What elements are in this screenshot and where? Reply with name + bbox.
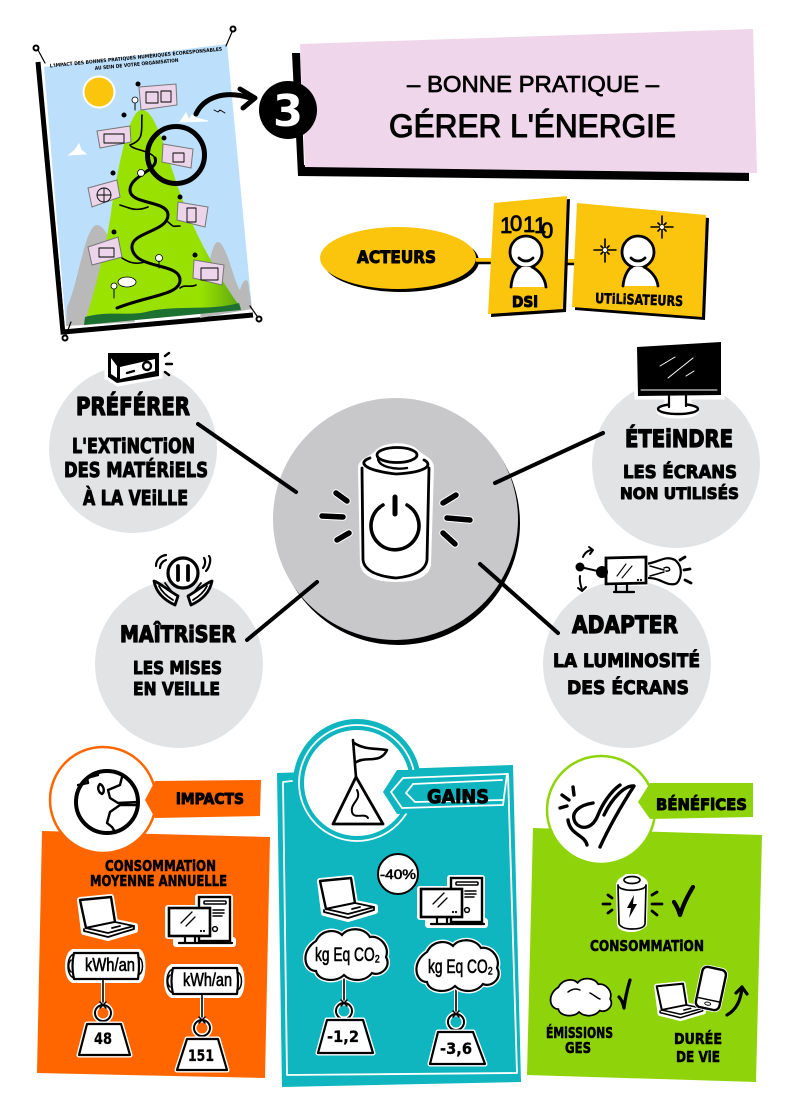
poster road xyxy=(117,158,180,308)
label: durée de vie: DURÉE xyxy=(674,1029,722,1048)
poster thumbnail: AU SEIN DE VOTRE ORGANISATION xyxy=(95,58,179,72)
arrow to step badge xyxy=(196,89,255,114)
icon: battery with lightning xyxy=(603,875,662,931)
poster clouds xyxy=(69,113,208,155)
poster frame xyxy=(38,62,253,332)
side circle: éteindre xyxy=(592,340,760,548)
label: émissions GES: GES xyxy=(565,1039,591,1057)
panel: bénéfices xyxy=(527,756,762,1082)
central circle xyxy=(273,398,520,645)
bénéfices heading: BÉNÉFiCES xyxy=(656,795,747,814)
inner white line xyxy=(283,774,517,1075)
text: EN VEiLLE xyxy=(133,679,220,700)
poster hills xyxy=(66,225,252,326)
step number badge xyxy=(259,81,317,139)
gauge: desktop 151 kWh/an: kWh/an xyxy=(183,970,232,990)
badge: -40% xyxy=(378,854,418,894)
text: NON UTiLiSÉS xyxy=(620,484,739,503)
label: durée de vie: DE ViE xyxy=(676,1048,720,1066)
arrow: up xyxy=(727,987,747,1015)
poster flags xyxy=(88,84,224,285)
icon: OK hand xyxy=(547,756,655,864)
side circle: maîtriser xyxy=(95,555,263,748)
gauge: laptop -1,2 kg Eq CO2 xyxy=(305,929,388,1053)
banner shadow xyxy=(292,53,749,181)
title text: – BONNE PRATIQUE – xyxy=(407,71,659,97)
heading: ÉTEiNDRE xyxy=(625,424,733,453)
actors row: ACTEURS xyxy=(357,248,436,268)
gauge: desktop -3,6 kg Eq CO2: -3,6 xyxy=(440,1039,472,1058)
icon: screen with brightness bulb xyxy=(576,547,691,592)
label: émissions GES: ÉMiSSIONS xyxy=(546,1023,613,1042)
icon: power switch xyxy=(106,351,172,385)
impacts tab xyxy=(145,780,261,818)
gauge: desktop -3,6 kg Eq CO2: kg Eq CO₂ xyxy=(428,957,493,978)
card: DSI: DSi xyxy=(512,293,538,311)
poster sun xyxy=(82,76,116,108)
text: À LA VEiLLE xyxy=(83,486,188,510)
icon: desktop xyxy=(420,878,485,925)
arrow: down xyxy=(619,980,630,1008)
text: LES MiSES xyxy=(133,658,222,679)
icon: monitor xyxy=(635,340,723,417)
connectors xyxy=(476,258,575,264)
icon: globe xyxy=(50,747,156,853)
battery rays xyxy=(322,493,470,544)
gains tab xyxy=(383,770,507,814)
poster mountain xyxy=(85,110,241,322)
card: DSI xyxy=(488,196,570,317)
gauge: laptop -1,2 kg Eq CO2: -1,2 xyxy=(327,1027,359,1046)
text: LES ÉCRANS xyxy=(623,461,737,483)
actors oval xyxy=(323,230,479,292)
gauge: laptop 48 kWh/an xyxy=(67,951,144,1055)
card: utilisateurs xyxy=(572,203,709,320)
poster figures xyxy=(111,97,162,289)
text: LA LUMiNOSiTÉ xyxy=(553,649,700,672)
label: consommation: CONSOMMATiON xyxy=(590,937,704,955)
panel: gains xyxy=(277,719,521,1087)
panel: impacts xyxy=(37,747,270,1078)
label: émissions GES xyxy=(546,1023,613,1057)
impacts subheading xyxy=(90,857,227,890)
title banner: GÉRER L'ÉNERGIE xyxy=(389,108,676,144)
poster thumbnail xyxy=(34,26,262,340)
gauge: desktop 151 kWh/an: 151 xyxy=(188,1046,214,1065)
text xyxy=(620,461,739,503)
text: L'EXTiNCTiON xyxy=(72,434,195,458)
poster pins xyxy=(34,26,262,340)
gauge: laptop 48 kWh/an: 48 xyxy=(94,1029,112,1048)
focus circle xyxy=(148,126,204,184)
badge: -40%: -40% xyxy=(380,866,416,882)
connector lines xyxy=(198,424,603,640)
text xyxy=(133,658,222,700)
icon: pause between hands xyxy=(154,555,212,605)
bénéfices tab xyxy=(638,783,753,819)
side circle: préférer xyxy=(49,351,217,533)
gains heading: GAiNS xyxy=(427,786,489,808)
gauge: laptop 48 kWh/an: kWh/an xyxy=(85,955,135,975)
title banner xyxy=(292,29,757,181)
impacts subheading: CONSOMMATiON xyxy=(105,857,216,875)
impacts heading: iMPACTS xyxy=(176,790,244,808)
step number badge: 3 xyxy=(273,86,303,137)
card: utilisateurs: UTiLiSATEURS xyxy=(595,291,683,310)
poster caption: L'IMPACT DES BONNES PRATIQUES NUMÉRIQUES ÉCORESPONSABLES xyxy=(49,45,223,69)
gauge: desktop 151 kWh/an xyxy=(166,966,242,1070)
card: DSI: 10110 xyxy=(500,211,553,243)
label: durée de vie xyxy=(674,1029,722,1066)
gauge: desktop -3,6 kg Eq CO2 xyxy=(416,940,499,1064)
poster sheet xyxy=(42,42,254,329)
heading: MAÎTRiSER xyxy=(120,622,236,648)
impacts subheading: MOYENNE ANNUELLE xyxy=(90,872,227,890)
heading: PRÉFÉRER xyxy=(76,392,190,421)
gauge: laptop -1,2 kg Eq CO2: kg Eq CO₂ xyxy=(315,945,380,966)
banner panel xyxy=(300,29,757,173)
text xyxy=(64,434,208,510)
icon: laptop and phone xyxy=(657,966,727,1019)
icon: desktop xyxy=(168,897,233,944)
arrow: down xyxy=(674,887,693,915)
side circle: adapter xyxy=(543,547,711,748)
icon: cloud xyxy=(551,979,611,1016)
text: DES MATÉRiELS xyxy=(64,458,208,482)
text xyxy=(553,649,700,699)
icon: laptop xyxy=(80,897,135,938)
actors row xyxy=(320,196,709,320)
heading: ADAPTER xyxy=(572,611,678,639)
icon: battery with power symbol xyxy=(322,443,470,582)
text: DES ÉCRANS xyxy=(567,676,689,699)
icon: flag on summit xyxy=(304,730,410,836)
icon: laptop xyxy=(320,878,375,919)
